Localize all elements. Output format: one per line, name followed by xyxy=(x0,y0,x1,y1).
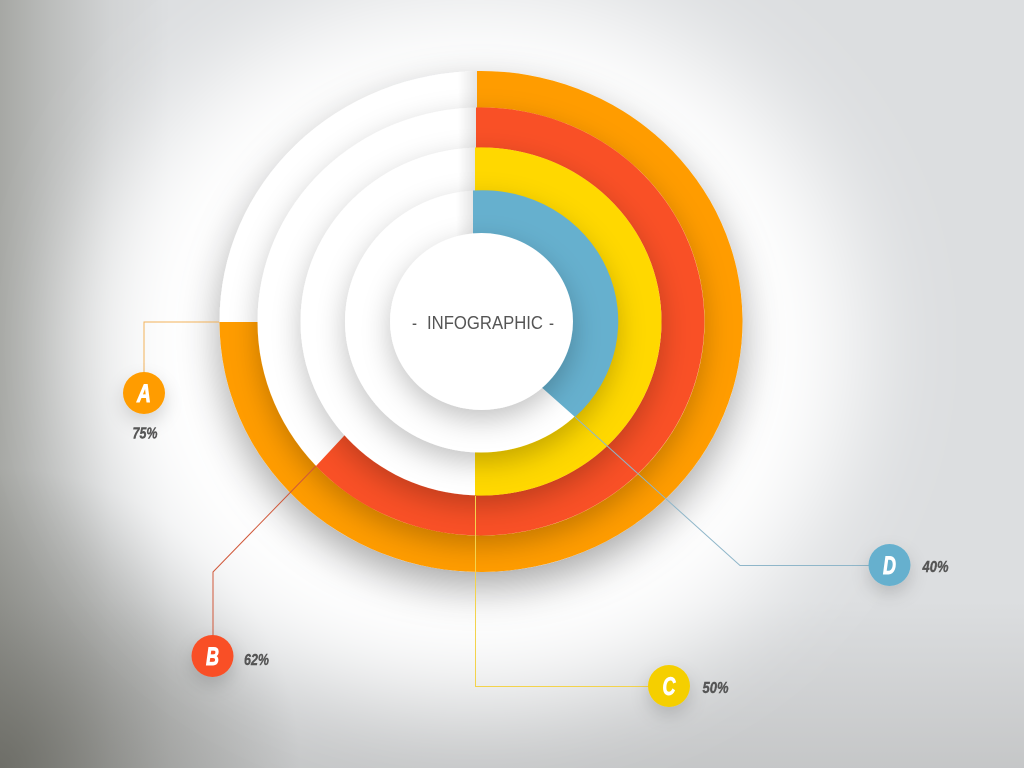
marker C: C xyxy=(662,673,676,701)
center title: - xyxy=(549,313,554,333)
marker C xyxy=(648,665,690,707)
center circle xyxy=(390,233,573,410)
ring B: red 62% xyxy=(258,107,704,536)
leader line B xyxy=(213,466,316,636)
marker A: A xyxy=(136,380,151,408)
marker B: B xyxy=(206,643,219,671)
donut chart xyxy=(220,71,742,572)
label 50%: 50% xyxy=(702,680,728,697)
marker A xyxy=(123,372,165,414)
ring D: blue 40% xyxy=(345,190,618,452)
center title: - xyxy=(412,313,417,333)
leader line C xyxy=(476,496,650,686)
marker D xyxy=(868,544,910,586)
marker D: D xyxy=(883,552,896,580)
leader line A xyxy=(144,322,219,375)
marker B xyxy=(192,635,234,677)
label 75%: 75% xyxy=(132,426,158,442)
center title: INFOGRAPHIC xyxy=(427,313,543,333)
ring A: orange 75% xyxy=(220,71,742,572)
leader line D xyxy=(575,417,870,566)
ring C: yellow 50% xyxy=(300,147,662,496)
label 40%: 40% xyxy=(922,559,948,576)
label 62%: 62% xyxy=(244,652,269,669)
